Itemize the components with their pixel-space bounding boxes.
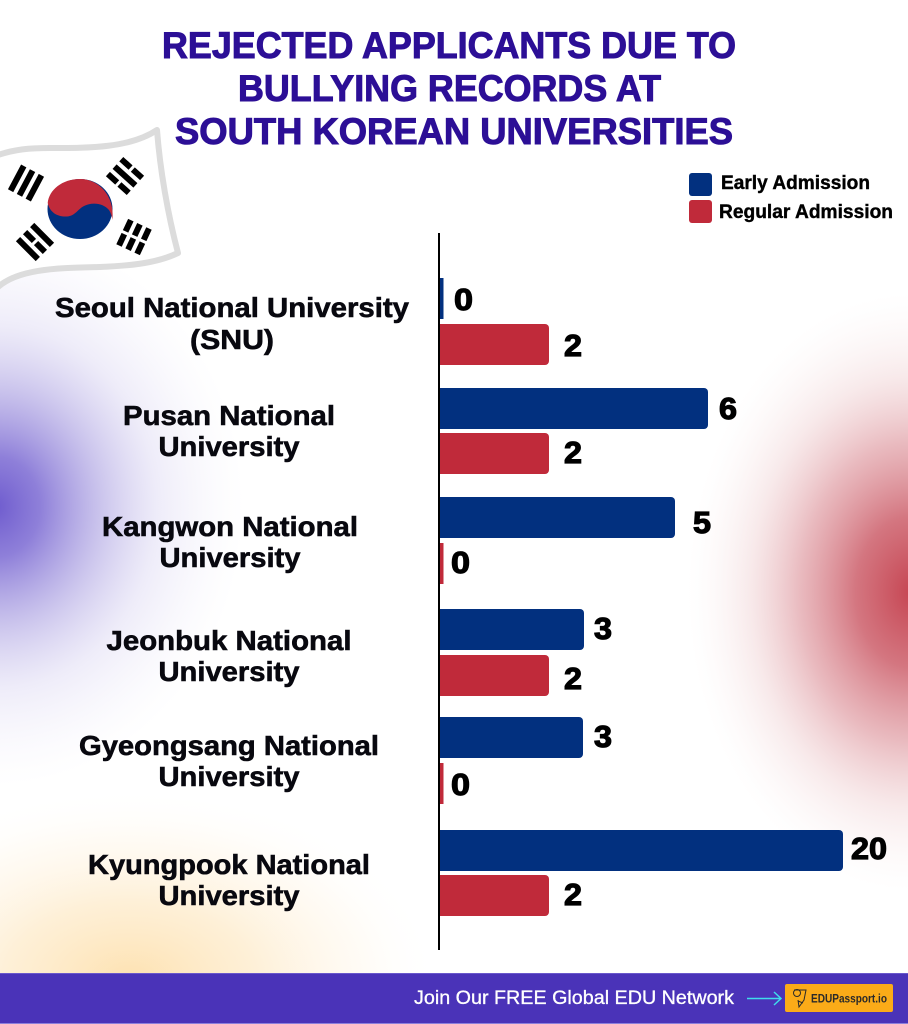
bars: Pusan National University [440, 388, 737, 474]
trigram bottom right [116, 219, 152, 255]
chart axis [438, 233, 440, 950]
logo badge [785, 984, 893, 1012]
bars: Kangwon National University: 5 [693, 505, 711, 540]
university labels: Seoul National University [55, 292, 409, 323]
university labels: University [158, 880, 300, 911]
university labels: Jeonbuk National [106, 625, 352, 656]
bars: Kyungpook National University: 2 [564, 877, 582, 912]
title: SOUTH KOREAN UNIVERSITIES [175, 111, 733, 152]
arrow [747, 992, 781, 1005]
bars: Pusan National University: 2 [564, 435, 582, 470]
bars: Gyeongsang National University [440, 717, 612, 804]
university labels [55, 292, 409, 911]
bars: Kyungpook National University [440, 830, 887, 916]
taegeuk [48, 179, 113, 239]
university labels: Kangwon National [102, 511, 358, 542]
legend: Early Admission [721, 173, 870, 194]
university labels: University [158, 761, 300, 792]
footer text: Join Our FREE Global EDU Network [414, 988, 735, 1009]
university labels: (SNU) [190, 324, 274, 355]
bar chart [440, 278, 887, 916]
legend [689, 173, 893, 223]
bars: Kangwon National University: 0 [451, 545, 470, 580]
title: REJECTED APPLICANTS DUE TO [162, 25, 736, 66]
bars: Pusan National University: 6 [719, 391, 737, 426]
trigram bottom left [16, 223, 54, 261]
trigram top right [106, 157, 144, 195]
bars: Kangwon National University [440, 497, 711, 584]
university labels: Gyeongsang National [79, 730, 379, 761]
university labels: Pusan National [123, 400, 335, 431]
bars: Gyeongsang National University: 0 [451, 767, 470, 802]
bars: Kyungpook National University: 20 [851, 831, 887, 866]
title [162, 25, 736, 152]
bars: Seoul National University: 0 [454, 282, 473, 317]
university labels: Kyungpook National [88, 849, 370, 880]
university labels: University [158, 431, 300, 462]
bars: Gyeongsang National University: 3 [594, 719, 612, 754]
bars: Jeonbuk National University: 2 [564, 661, 582, 696]
bars: Jeonbuk National University [440, 609, 612, 696]
icon: South Korean flag [0, 130, 178, 290]
university labels: University [158, 656, 300, 687]
bars: Seoul National University: 2 [564, 328, 582, 363]
bars: Seoul National University [440, 278, 582, 365]
footer banner [0, 973, 908, 1024]
bars: Jeonbuk National University: 3 [594, 611, 612, 646]
trigram top left [8, 165, 44, 201]
logo badge: EDUPassport.io [811, 992, 887, 1006]
university labels: University [160, 542, 301, 573]
title: BULLYING RECORDS AT [238, 68, 661, 109]
legend: Regular Admission [719, 202, 893, 223]
logo icon [794, 990, 806, 1007]
